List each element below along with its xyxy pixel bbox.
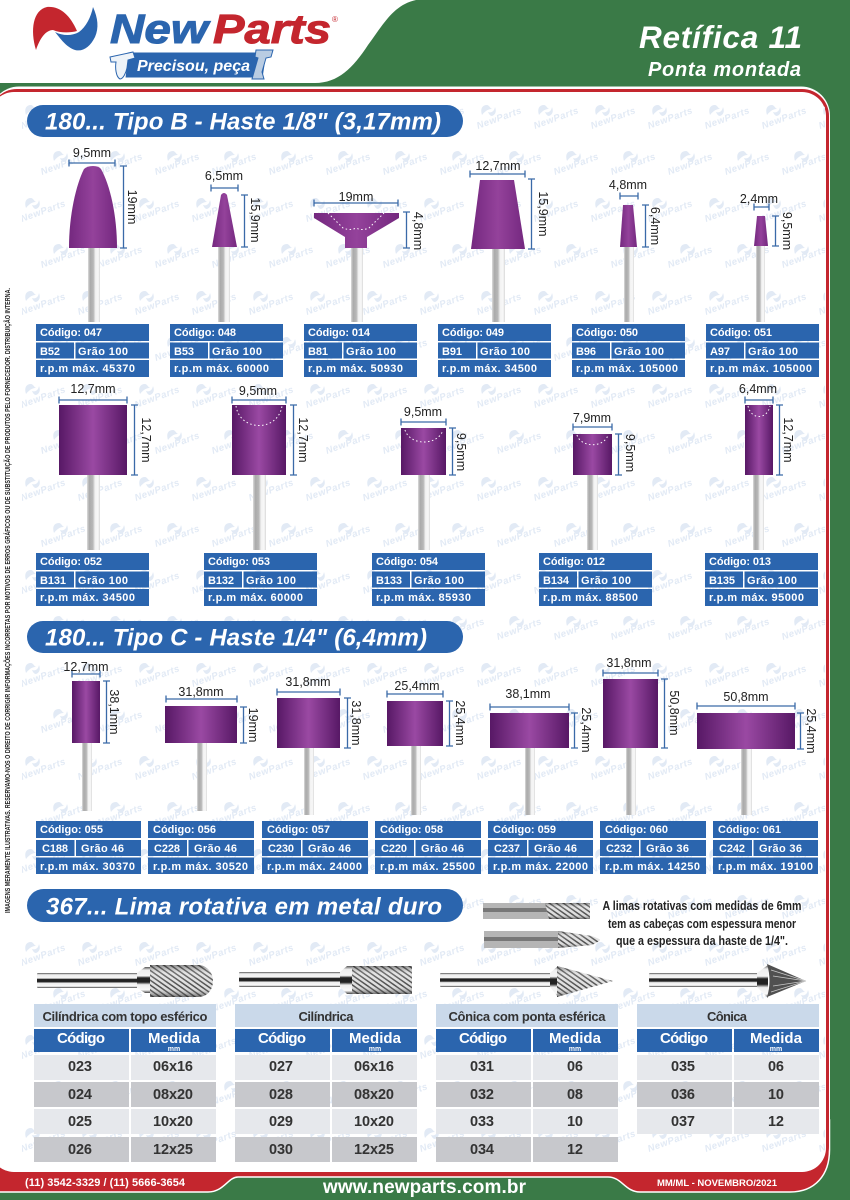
small burr: cylindrical detail bbox=[483, 903, 590, 919]
card 059: C237 bbox=[494, 843, 520, 855]
footer red band bbox=[0, 1120, 830, 1192]
card 051: A97 bbox=[710, 346, 730, 358]
card 057: Código: 057 bbox=[267, 824, 330, 836]
card 058 bbox=[375, 821, 481, 874]
table: Cônica: 10 bbox=[768, 1087, 784, 1103]
card 014: Código: 014 bbox=[308, 327, 371, 339]
tool 051 bbox=[740, 192, 794, 322]
tool 059: 25,4mm bbox=[579, 707, 593, 753]
tool 054: 9,5mm bbox=[454, 433, 468, 471]
tool 051: 2,4mm bbox=[740, 192, 778, 206]
card 013: r.p.m máx. 95000 bbox=[709, 592, 804, 604]
tool 047: 19mm bbox=[125, 190, 139, 224]
table: Cilíndrica: 08x20 bbox=[354, 1087, 394, 1103]
card 061: C242 bbox=[719, 843, 745, 855]
table: Cilíndrica com topo esférico: mm bbox=[168, 1046, 180, 1053]
tool 059 bbox=[490, 687, 593, 815]
table: Cônica com ponta esférica: Cônica com ponta esférica bbox=[448, 1009, 606, 1024]
tool 061: 25,4mm bbox=[804, 708, 818, 754]
table: Cônica bbox=[637, 1004, 819, 1134]
card 060: Código: 060 bbox=[605, 824, 668, 836]
table: Cilíndrica com topo esférico: 12x25 bbox=[153, 1142, 193, 1158]
card 047: Código: 047 bbox=[40, 327, 102, 339]
burr: cone bbox=[649, 964, 806, 998]
card 057 bbox=[262, 821, 368, 874]
heading: Tipo B: 180... Tipo B - Haste 1/8" (3,17mm) bbox=[45, 108, 441, 136]
card 055: C188 bbox=[42, 843, 68, 855]
card 049: Código: 049 bbox=[442, 327, 504, 339]
table: Cônica: Cônica bbox=[707, 1009, 748, 1024]
card 059: r.p.m máx. 22000 bbox=[493, 861, 588, 873]
card 054: r.p.m máx. 85930 bbox=[376, 592, 471, 604]
card 061: Grão 36 bbox=[759, 843, 802, 855]
card 060 bbox=[600, 821, 706, 874]
table: Cilíndrica: 06x16 bbox=[354, 1059, 394, 1075]
burr: cylindrical spherical top bbox=[37, 965, 213, 997]
card 050: B96 bbox=[576, 346, 596, 358]
header title: Retífica 11 bbox=[639, 19, 802, 55]
slogan pill: Precisou, peça bbox=[137, 58, 250, 75]
table: Cônica com ponta esférica: mm bbox=[569, 1046, 581, 1053]
tool 053 bbox=[232, 384, 310, 550]
tool 055: 38,1mm bbox=[107, 689, 121, 735]
icon: logo swoosh bbox=[33, 7, 97, 50]
table: Cônica: 06 bbox=[768, 1059, 784, 1075]
card 048: Código: 048 bbox=[174, 327, 236, 339]
table: Cilíndrica com topo esférico: 023 bbox=[68, 1059, 92, 1075]
table: Cônica com ponta esférica: 12 bbox=[567, 1142, 583, 1158]
card 053: Código: 053 bbox=[208, 556, 270, 568]
card 014: B81 bbox=[308, 346, 328, 358]
table: Cilíndrica: Medida bbox=[349, 1030, 402, 1047]
table: Cônica com ponta esférica: 033 bbox=[470, 1114, 494, 1130]
table: Cilíndrica com topo esférico: 10x20 bbox=[153, 1114, 193, 1130]
card 012 bbox=[539, 553, 652, 606]
footer date: MM/ML - NOVEMBRO/2021 bbox=[657, 1178, 778, 1189]
card 056: Grão 46 bbox=[194, 843, 237, 855]
tool 060 bbox=[603, 656, 681, 815]
card 014: Grão 100 bbox=[346, 346, 396, 358]
tool 061 bbox=[697, 690, 818, 815]
card 058: r.p.m máx. 25500 bbox=[380, 861, 475, 873]
logo: Parts bbox=[213, 6, 331, 52]
card 052: r.p.m máx. 34500 bbox=[40, 592, 135, 604]
tool 014: 4,8mm bbox=[411, 212, 425, 250]
tool 055: 12,7mm bbox=[63, 660, 109, 674]
table: Cilíndrica: 029 bbox=[269, 1114, 293, 1130]
tool 012: 7,9mm bbox=[573, 411, 611, 425]
tool 052: 12,7mm bbox=[139, 417, 153, 463]
tool 057 bbox=[277, 675, 363, 815]
table: Cilíndrica com topo esférico: Código bbox=[57, 1030, 105, 1047]
tool 048: 6,5mm bbox=[205, 169, 243, 183]
card 056: C228 bbox=[154, 843, 180, 855]
tool 047 bbox=[69, 146, 139, 322]
card 048: B53 bbox=[174, 346, 194, 358]
table: Cônica: 036 bbox=[671, 1087, 695, 1103]
tool 056: 31,8mm bbox=[178, 685, 224, 699]
card 056: Código: 056 bbox=[153, 824, 216, 836]
table: Cônica com ponta esférica: Código bbox=[459, 1030, 507, 1047]
card 054: Grão 100 bbox=[414, 575, 464, 587]
burr: cone with spherical tip bbox=[440, 966, 613, 997]
card 050: Grão 100 bbox=[614, 346, 664, 358]
note about 6mm burrs: tem as cabeças com espessura menor bbox=[608, 916, 796, 931]
tool 059: 38,1mm bbox=[505, 687, 551, 701]
card 053: r.p.m máx. 60000 bbox=[208, 592, 303, 604]
card 058: Grão 46 bbox=[421, 843, 464, 855]
logo wordmark: New bbox=[110, 6, 212, 52]
tool 049: 15,9mm bbox=[536, 191, 550, 237]
table: Cilíndrica com topo esférico: 06x16 bbox=[153, 1059, 193, 1075]
table: Cilíndrica com topo esférico: 08x20 bbox=[153, 1087, 193, 1103]
table: Cônica: 037 bbox=[671, 1114, 695, 1130]
table: Cilíndrica com topo esférico: Cilíndrica com topo esférico bbox=[42, 1009, 208, 1024]
table: Cônica com ponta esférica: 08 bbox=[567, 1087, 583, 1103]
table: Cilíndrica: Código bbox=[258, 1030, 306, 1047]
tool 058: 25,4mm bbox=[453, 700, 467, 746]
tool 053: 12,7mm bbox=[296, 417, 310, 463]
card 012: r.p.m máx. 88500 bbox=[543, 592, 638, 604]
tool 054 bbox=[401, 405, 468, 550]
card 055 bbox=[36, 821, 141, 874]
card 057: r.p.m máx. 24000 bbox=[267, 861, 362, 873]
tool 054: 9,5mm bbox=[404, 405, 442, 419]
tool 012 bbox=[573, 411, 637, 550]
card 013 bbox=[705, 553, 818, 606]
card 013: Código: 013 bbox=[709, 556, 771, 568]
table: Cilíndrica: 12x25 bbox=[354, 1142, 394, 1158]
heading: Tipo C: 180... Tipo C - Haste 1/4" (6,4mm) bbox=[45, 624, 427, 652]
tool 060: 50,8mm bbox=[667, 690, 681, 736]
card 047: r.p.m máx. 45370 bbox=[40, 363, 135, 375]
card 058: Código: 058 bbox=[380, 824, 443, 836]
table: Cônica com ponta esférica: 031 bbox=[470, 1059, 494, 1075]
logo: ® bbox=[332, 15, 338, 24]
card 059: Grão 46 bbox=[534, 843, 577, 855]
card 053: Grão 100 bbox=[246, 575, 296, 587]
card 055: Grão 46 bbox=[81, 843, 124, 855]
table: Cônica com ponta esférica bbox=[436, 1004, 618, 1162]
tool 050: 6,4mm bbox=[648, 207, 662, 245]
card 048: Grão 100 bbox=[212, 346, 262, 358]
small burr: conical detail bbox=[484, 931, 600, 948]
card 055: Código: 055 bbox=[40, 824, 103, 836]
card 051 bbox=[706, 324, 819, 377]
table: Cônica com ponta esférica: 10 bbox=[567, 1114, 583, 1130]
card 050: Código: 050 bbox=[576, 327, 638, 339]
card 014: r.p.m máx. 50930 bbox=[308, 363, 403, 375]
card 056 bbox=[148, 821, 254, 874]
card 060: C232 bbox=[606, 843, 632, 855]
tool 061: 50,8mm bbox=[723, 690, 769, 704]
card 053: B132 bbox=[208, 575, 234, 587]
logo bbox=[33, 6, 338, 79]
card 060: r.p.m máx. 14250 bbox=[605, 861, 700, 873]
tool 013: 6,4mm bbox=[739, 382, 777, 396]
tool 014 bbox=[314, 190, 425, 322]
card 047: B52 bbox=[40, 346, 60, 358]
card 061: Código: 061 bbox=[718, 824, 781, 836]
table: Cilíndrica com topo esférico: 025 bbox=[68, 1114, 92, 1130]
table: Cônica: mm bbox=[770, 1046, 782, 1053]
card 049: B91 bbox=[442, 346, 462, 358]
tool 014: 19mm bbox=[339, 190, 373, 204]
card 013: B135 bbox=[709, 575, 735, 587]
card 013: Grão 100 bbox=[747, 575, 797, 587]
card 052: Código: 052 bbox=[40, 556, 102, 568]
tool 058 bbox=[387, 679, 467, 815]
card 048: r.p.m máx. 60000 bbox=[174, 363, 269, 375]
table: Cônica com ponta esférica: 034 bbox=[470, 1142, 494, 1158]
card 054 bbox=[372, 553, 485, 606]
tool 052 bbox=[59, 382, 153, 550]
tool 049: 12,7mm bbox=[475, 159, 521, 173]
card 050: r.p.m máx. 105000 bbox=[576, 363, 678, 375]
slogan pill bbox=[110, 50, 273, 79]
tool 057: 31,8mm bbox=[285, 675, 331, 689]
tool 012: 9,5mm bbox=[623, 434, 637, 472]
tool 050: 4,8mm bbox=[609, 178, 647, 192]
table: Cilíndrica: 028 bbox=[269, 1087, 293, 1103]
card 052: B131 bbox=[40, 575, 66, 587]
footer website: www.newparts.com.br bbox=[322, 1177, 527, 1198]
card 057: C230 bbox=[268, 843, 294, 855]
tool 056: 19mm bbox=[246, 708, 260, 742]
table: Cilíndrica: Cilíndrica bbox=[298, 1009, 354, 1024]
side legal note: IMAGENS MERAMENTE ILUSTRATIVAS. RESERVAMO-NOS O DIREITO DE CORRIGIR INFORMAÇÕES INCORRETAS POR MOTIVOS DE ERROS GRÁFICOS OU DE SUBSTITUIÇÃO DE PRODUTOS PELO FORNECEDOR. DISTRIBUIÇÃO INTERNA. bbox=[3, 288, 12, 913]
card 052 bbox=[36, 553, 149, 606]
tool 058: 25,4mm bbox=[394, 679, 440, 693]
tool 047: 9,5mm bbox=[73, 146, 111, 160]
card 051: Grão 100 bbox=[748, 346, 798, 358]
tool 049 bbox=[470, 159, 550, 322]
note about 6mm burrs: A limas rotativas com medidas de 6mm bbox=[602, 898, 802, 913]
header title bbox=[639, 19, 802, 81]
table: Cônica: 035 bbox=[671, 1059, 695, 1075]
card 049: Grão 100 bbox=[480, 346, 530, 358]
card 058: C220 bbox=[381, 843, 407, 855]
note about 6mm burrs bbox=[602, 898, 802, 948]
card 047: Grão 100 bbox=[78, 346, 128, 358]
card 055: r.p.m máx. 30370 bbox=[40, 861, 135, 873]
table: Cônica: Medida bbox=[750, 1030, 803, 1047]
card 059: Código: 059 bbox=[493, 824, 556, 836]
card 054: Código: 054 bbox=[376, 556, 439, 568]
card 049: r.p.m máx. 34500 bbox=[442, 363, 537, 375]
card 053 bbox=[204, 553, 317, 606]
header white area bbox=[0, 0, 416, 83]
table: Cilíndrica com topo esférico: 026 bbox=[68, 1142, 92, 1158]
tool 013 bbox=[739, 382, 795, 550]
tool 056 bbox=[165, 685, 260, 811]
tool 052: 12,7mm bbox=[70, 382, 116, 396]
card 051: r.p.m máx. 105000 bbox=[710, 363, 812, 375]
table: Cilíndrica: 027 bbox=[269, 1059, 293, 1075]
card 056: r.p.m máx. 30520 bbox=[153, 861, 248, 873]
card 057: Grão 46 bbox=[308, 843, 351, 855]
tool 057: 31,8mm bbox=[349, 700, 363, 746]
card 012: B134 bbox=[543, 575, 570, 587]
card 012: Grão 100 bbox=[581, 575, 631, 587]
tool 055 bbox=[63, 660, 121, 811]
table: Cônica: Código bbox=[660, 1030, 708, 1047]
card 059 bbox=[488, 821, 593, 874]
card 061 bbox=[713, 821, 818, 874]
heading: Lima rotativa: 367... Lima rotativa em metal duro bbox=[46, 894, 442, 920]
tool 013: 12,7mm bbox=[781, 417, 795, 463]
header subtitle: Ponta montada bbox=[648, 59, 801, 81]
table: Cônica com ponta esférica: Medida bbox=[549, 1030, 602, 1047]
tool 051: 9,5mm bbox=[780, 212, 794, 250]
card 054: B133 bbox=[376, 575, 402, 587]
card 061: r.p.m máx. 19100 bbox=[718, 861, 813, 873]
card 012: Código: 012 bbox=[543, 556, 605, 568]
card 048 bbox=[170, 324, 283, 377]
table: Cilíndrica: mm bbox=[369, 1046, 381, 1053]
tool 048 bbox=[205, 169, 262, 322]
card 049 bbox=[438, 324, 551, 377]
tool 048: 15,9mm bbox=[248, 197, 262, 243]
table: Cilíndrica: 030 bbox=[269, 1142, 293, 1158]
note about 6mm burrs: que a espessura da haste de 1/4". bbox=[616, 933, 788, 948]
burr: cylindrical bbox=[239, 966, 412, 994]
table: Cilíndrica com topo esférico bbox=[34, 1004, 216, 1162]
tool 050 bbox=[609, 178, 662, 322]
footer phones: (11) 3542-3329 / (11) 5666-3654 bbox=[25, 1177, 186, 1189]
tool 053: 9,5mm bbox=[239, 384, 277, 398]
card 014 bbox=[304, 324, 417, 377]
table: Cônica com ponta esférica: 032 bbox=[470, 1087, 494, 1103]
table: Cilíndrica com topo esférico: 024 bbox=[68, 1087, 92, 1103]
table: Cilíndrica: 10x20 bbox=[354, 1114, 394, 1130]
table: Cilíndrica com topo esférico: Medida bbox=[148, 1030, 201, 1047]
card 047 bbox=[36, 324, 149, 377]
card 060: Grão 36 bbox=[646, 843, 689, 855]
card 051: Código: 051 bbox=[710, 327, 772, 339]
card 050 bbox=[572, 324, 685, 377]
table: Cilíndrica bbox=[235, 1004, 417, 1162]
table: Cônica: 12 bbox=[768, 1114, 784, 1130]
card 052: Grão 100 bbox=[78, 575, 128, 587]
table: Cônica com ponta esférica: 06 bbox=[567, 1059, 583, 1075]
tool 060: 31,8mm bbox=[606, 656, 652, 670]
